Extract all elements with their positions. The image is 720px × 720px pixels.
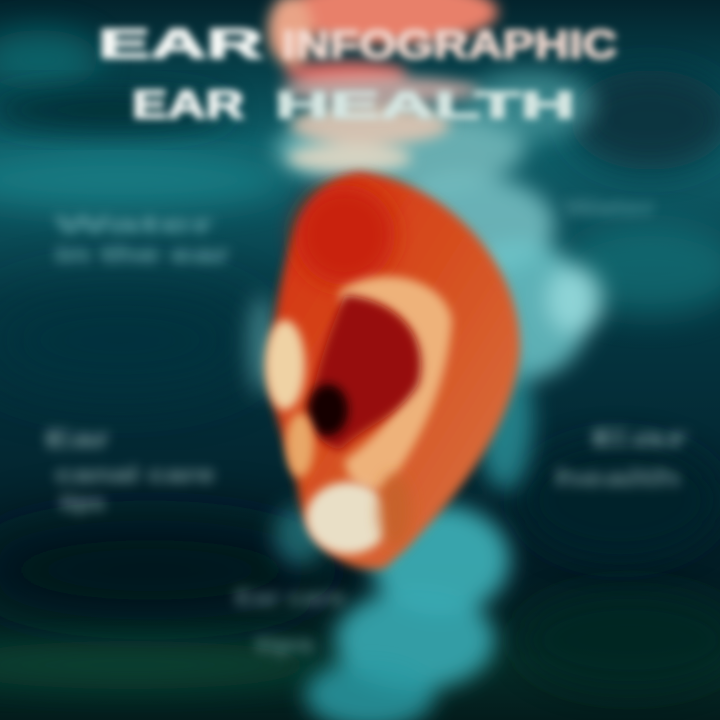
text block: lower right: health — [555, 465, 680, 492]
text block: upper right: Water — [565, 195, 656, 220]
ear: pale left tragus — [265, 320, 305, 410]
text block: lower left: canal care — [55, 462, 215, 487]
text block: bottom centre — [235, 585, 345, 657]
text block: lower left: Ear — [45, 426, 110, 453]
water plume behind the ear — [248, 70, 603, 720]
ear: outer helix — [270, 172, 520, 569]
text block: lower right — [555, 425, 690, 492]
text block: bottom centre: Ear care — [235, 585, 345, 610]
text block: upper left: Water — [55, 212, 216, 237]
title — [98, 20, 617, 127]
ear: red top of helix — [295, 185, 395, 285]
ear illustration: main ear — [265, 172, 520, 569]
text block: upper left: in the ear — [55, 242, 231, 267]
text block: bottom centre: tips — [255, 632, 315, 657]
ear: pale lobe — [306, 482, 390, 554]
ear illustration: upper lobe reflection — [268, 0, 498, 172]
text block: lower left: tips — [60, 490, 105, 515]
title: HEALTH — [275, 85, 575, 127]
text block: upper left — [55, 212, 231, 267]
title: EAR — [132, 83, 244, 127]
ear: pale antihelix — [340, 276, 452, 490]
ear: inner red concha — [310, 295, 421, 450]
title: EAR — [98, 20, 263, 67]
text block: lower left — [45, 426, 215, 515]
text block: lower right: Ear — [590, 425, 690, 452]
ear: dark canal — [308, 384, 348, 436]
title: INFOGRAPHIC — [282, 23, 617, 67]
